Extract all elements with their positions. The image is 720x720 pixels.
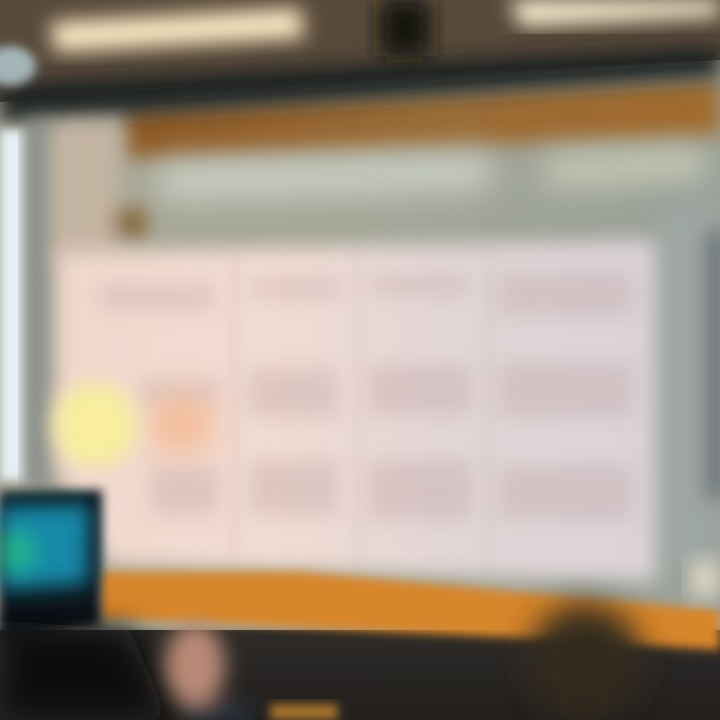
wall strip highlights (160, 148, 705, 198)
laptop body (0, 490, 102, 640)
dark beam (0, 46, 720, 122)
dark ceiling fixture (380, 0, 430, 56)
ceiling light: right (510, 0, 720, 26)
orange table (100, 572, 720, 650)
wall chart panel (56, 240, 656, 582)
wall base (0, 60, 720, 630)
audience head: right (527, 604, 643, 720)
audience head: skin tone (165, 623, 248, 720)
pinkish wall panel (52, 122, 145, 262)
grey column (26, 120, 52, 490)
dark foreground (0, 625, 720, 720)
laptop screen (0, 504, 90, 590)
laptop (0, 490, 102, 640)
ceiling light: left (50, 8, 305, 52)
yellow sticky note (53, 383, 137, 467)
orange patch at bottom (270, 704, 338, 720)
left window (0, 46, 36, 480)
foreground silhouette: left (0, 620, 170, 720)
chart column seams (232, 245, 491, 575)
right column (660, 200, 720, 570)
orange highlight on chart (148, 395, 216, 455)
white object on table (690, 560, 720, 598)
blurred text rows on chart (100, 272, 633, 520)
wooden band (125, 80, 720, 158)
ceiling (0, 0, 720, 102)
